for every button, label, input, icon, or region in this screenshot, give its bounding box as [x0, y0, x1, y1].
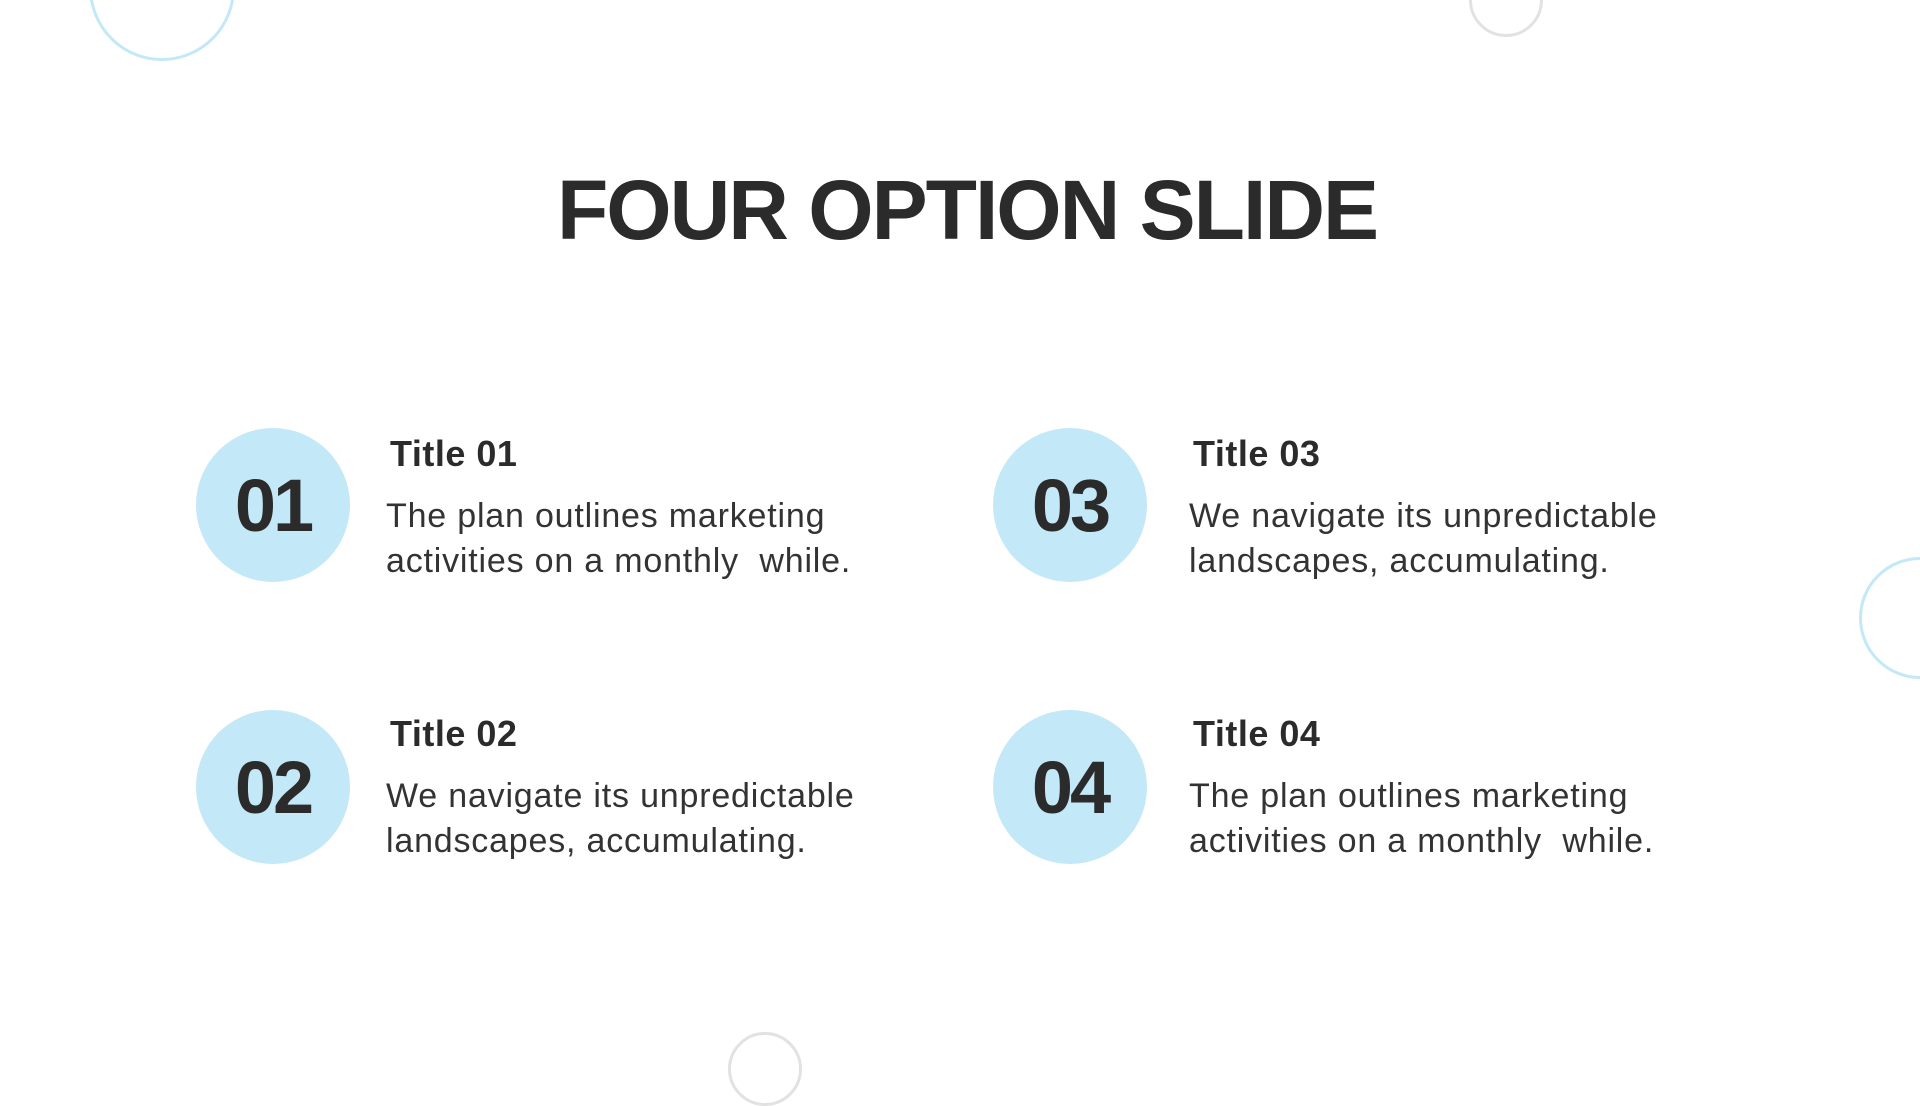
badge 01 [196, 428, 350, 582]
option 02 text: We navigate its unpredictable [386, 777, 855, 815]
badge 03: 03 [1032, 464, 1108, 546]
option 02 text: landscapes, accumulating. [386, 822, 807, 860]
option 03 text: landscapes, accumulating. [1189, 542, 1610, 580]
option 04 text: Title 04 [1193, 713, 1320, 754]
badge 04 [993, 710, 1147, 864]
option 03 text [1189, 433, 1658, 580]
option 01 text: activities on a monthly while. [386, 542, 851, 580]
title: FOUR OPTION SLIDE [557, 163, 1377, 257]
option 01 text [386, 433, 851, 580]
option 02 text: Title 02 [390, 713, 517, 754]
option 02 text [386, 713, 855, 860]
option 03 text: We navigate its unpredictable [1189, 497, 1658, 535]
option 03 text: Title 03 [1193, 433, 1320, 474]
decorative circle right [1859, 557, 1920, 679]
option 04 text [1189, 713, 1654, 860]
option 01 text: Title 01 [390, 433, 517, 474]
badge 04: 04 [1032, 746, 1108, 828]
decorative circle bottom [728, 1032, 802, 1106]
badge 01: 01 [235, 464, 311, 546]
option 04 text: activities on a monthly while. [1189, 822, 1654, 860]
badge 02: 02 [235, 746, 311, 828]
badge 02 [196, 710, 350, 864]
badge 03 [993, 428, 1147, 582]
decorative circle top-right [1469, 0, 1543, 37]
decorative circle top-left [89, 0, 235, 61]
option 04 text: The plan outlines marketing [1189, 777, 1628, 815]
option 01 text: The plan outlines marketing [386, 497, 825, 535]
